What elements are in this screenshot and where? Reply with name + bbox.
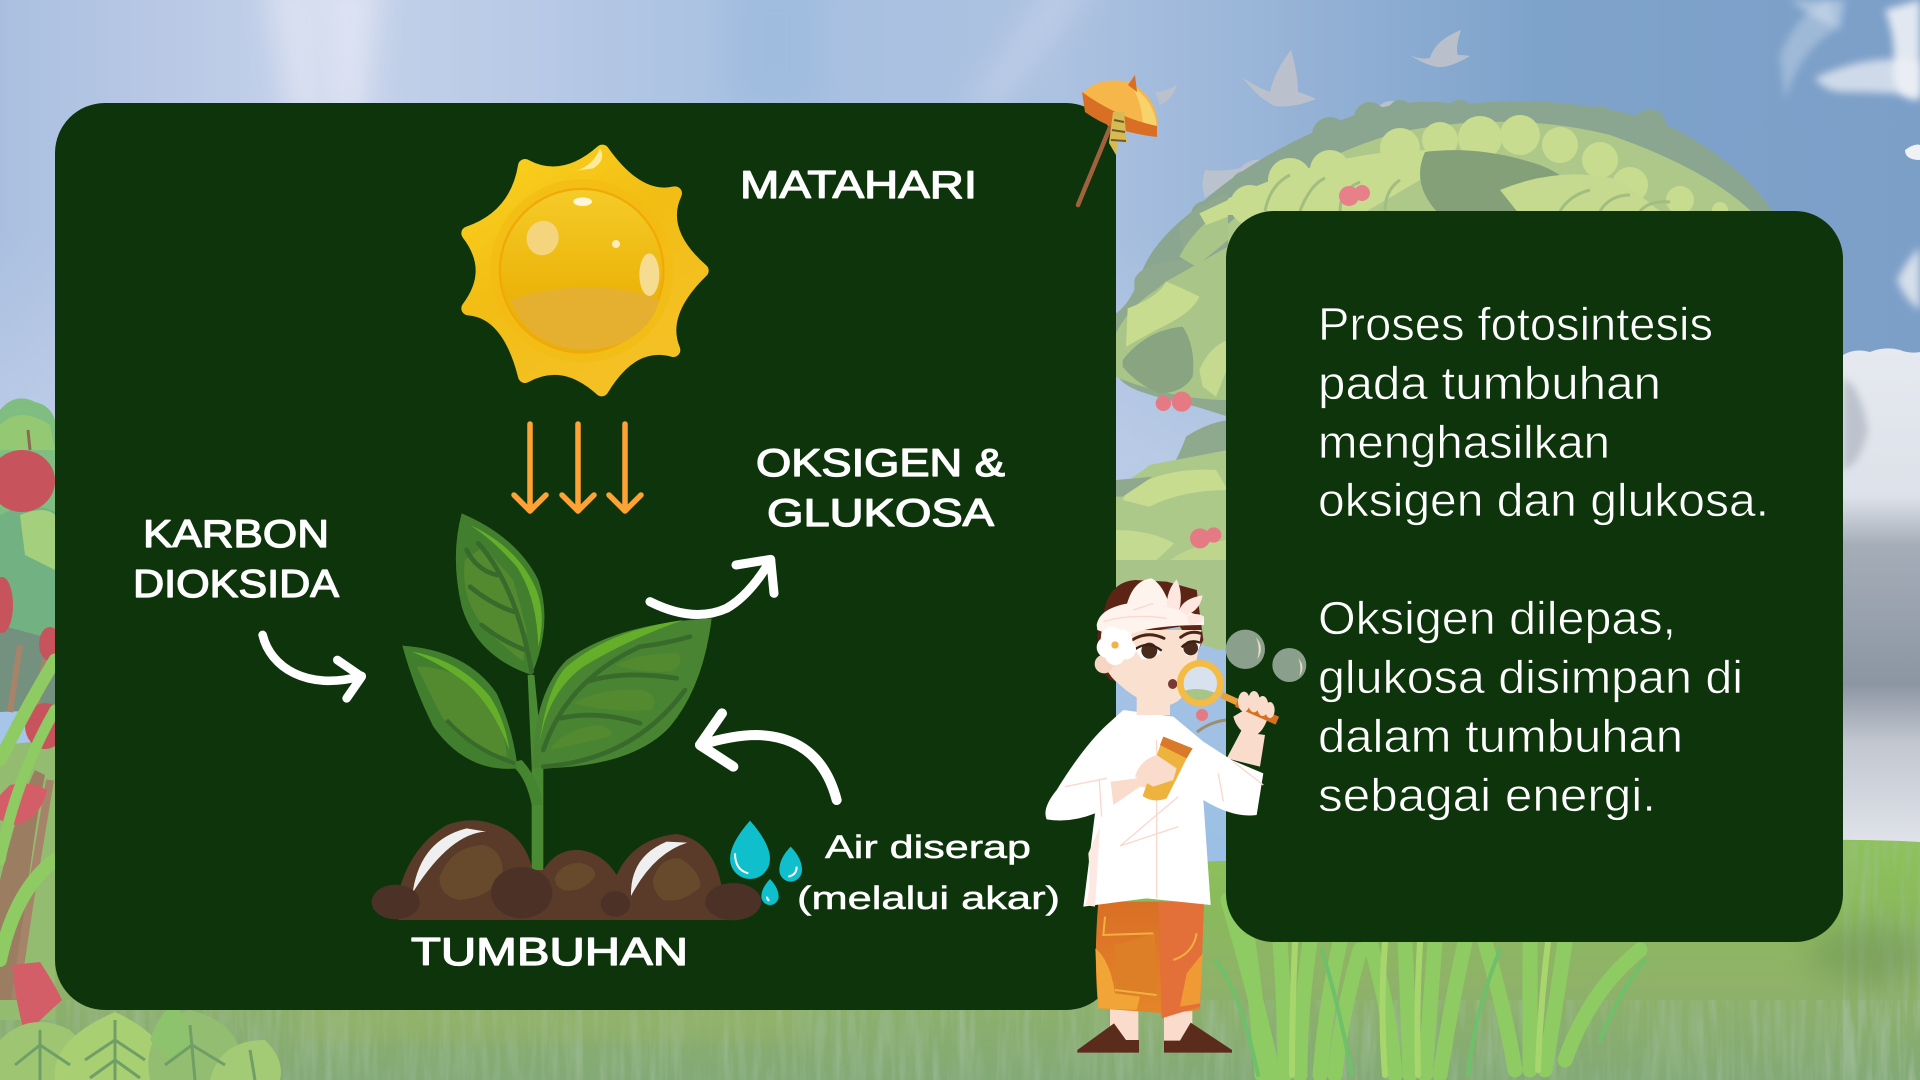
face	[1095, 630, 1202, 705]
label: water absorbed through roots	[797, 829, 1060, 916]
text block: explanation: glukosa disimpan di	[1318, 651, 1743, 703]
text block: explanation: Proses fotosintesis	[1318, 298, 1713, 350]
arrow: water absorbed	[700, 713, 837, 800]
background tree: left side foliage between panels	[1116, 193, 1228, 600]
heading: oksigen dan glukosa: GLUKOSA	[767, 492, 994, 535]
heading: oksigen dan glukosa	[756, 442, 1005, 535]
clouds on the right	[1780, 0, 1920, 842]
panel: diagram	[55, 103, 1116, 1010]
text block: explanation: sebagai energi.	[1318, 769, 1656, 821]
shoes	[1077, 1023, 1232, 1053]
large right leaf	[533, 618, 712, 768]
magnifying glass and hand	[1180, 663, 1277, 737]
arrow: oxygen and glucose out	[650, 559, 774, 614]
flower	[1097, 627, 1136, 665]
bubbles	[1226, 630, 1306, 682]
raised arm	[1227, 717, 1265, 767]
legs	[1110, 1008, 1192, 1042]
hair	[1097, 580, 1203, 682]
eyes, brows and mouth	[1133, 632, 1201, 689]
water drops	[730, 821, 802, 905]
icon: sun	[468, 148, 702, 389]
meadow	[0, 840, 1920, 1080]
arrow: carbon dioxide in	[263, 635, 362, 698]
shirt	[1045, 710, 1263, 907]
text block: explanation: Oksigen dilepas,	[1318, 592, 1676, 644]
heading: oksigen dan glukosa: OKSIGEN &	[756, 442, 1005, 485]
foliage and sky gap behind the boy	[1116, 560, 1226, 732]
strawberries	[0, 783, 62, 1035]
soil	[372, 820, 761, 920]
apples	[0, 450, 65, 749]
bottom leaf cluster	[0, 1005, 281, 1080]
icon: Balinese umbrella	[1078, 75, 1157, 205]
neck	[1137, 692, 1170, 715]
tall grass clumps	[1215, 900, 1645, 1075]
heading: tumbuhan: TUMBUHAN	[411, 931, 688, 974]
label: water absorbed through roots: Air diserap	[825, 829, 1031, 865]
background tree: crown above right panel	[1137, 100, 1775, 320]
text block: explanation: menghasilkan	[1318, 416, 1610, 468]
lower arm and hand holding bottle	[1111, 737, 1193, 805]
heading: karbon dioksida: DIOKSIDA	[133, 563, 339, 606]
birds	[1155, 30, 1470, 198]
left edge apple trees, grass and strawberries	[0, 398, 281, 1080]
illustration: plant in soil	[372, 513, 802, 920]
text block: explanation: dalam tumbuhan	[1318, 710, 1683, 762]
illustration: Balinese boy with magnifier	[1045, 578, 1306, 1053]
panel: explanation	[1226, 211, 1843, 942]
text block: explanation: oksigen dan glukosa.	[1318, 474, 1769, 526]
arrows: sunlight	[514, 424, 641, 511]
text block: explanation	[1318, 298, 1769, 821]
grass blades	[0, 660, 55, 960]
top leaf	[456, 513, 544, 675]
left leaf	[402, 646, 518, 769]
stem	[515, 675, 543, 873]
heading: karbon dioksida	[133, 513, 339, 606]
text block: explanation: pada tumbuhan	[1318, 357, 1661, 409]
fruit on crown	[1339, 185, 1370, 206]
sarong	[1095, 902, 1204, 1018]
label: water absorbed through roots: (melalui akar)	[797, 880, 1060, 916]
heading: karbon dioksida: KARBON	[143, 513, 329, 556]
headband	[1097, 578, 1204, 634]
heading: matahari: MATAHARI	[740, 164, 977, 207]
fruit	[1156, 392, 1221, 548]
